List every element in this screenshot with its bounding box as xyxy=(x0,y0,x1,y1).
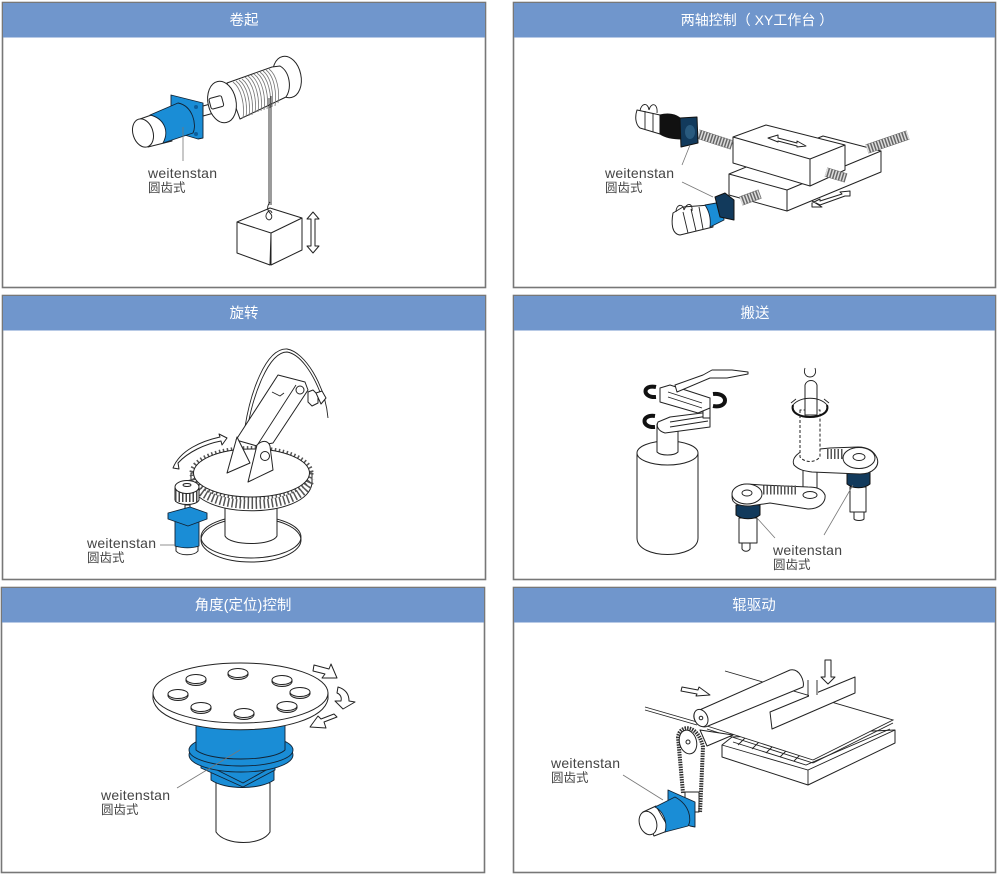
illustration: SCARA arm xyxy=(637,368,878,554)
panel frame xyxy=(2,588,484,872)
panel frame xyxy=(514,588,996,872)
label: weitenstan: weitenstan xyxy=(772,542,842,558)
header bar xyxy=(514,3,995,38)
gear teeth rim xyxy=(193,479,310,504)
callout line xyxy=(177,750,240,788)
blade gap xyxy=(809,675,818,705)
arrow right xyxy=(681,687,710,696)
panel: transfer xyxy=(514,296,996,580)
motion arrow xyxy=(173,434,227,469)
motor pulley xyxy=(685,792,699,812)
upper arm xyxy=(660,385,710,413)
spool flange far xyxy=(269,54,305,100)
column xyxy=(657,424,678,455)
wrist xyxy=(308,390,318,406)
lower motor flange xyxy=(715,193,734,220)
panel: rotation xyxy=(2,296,486,580)
belt xyxy=(678,728,703,813)
disc buttons xyxy=(168,668,310,720)
pressing blade xyxy=(770,677,855,729)
label: weitenstan: weitenstan xyxy=(86,535,156,551)
heading: 卷起 xyxy=(230,12,259,29)
gear top xyxy=(194,449,310,497)
motor flange xyxy=(171,95,203,139)
gear side xyxy=(191,473,312,511)
panel: angle positioning xyxy=(2,588,484,872)
arrow down xyxy=(821,660,835,684)
motor body xyxy=(655,797,690,832)
label: weitenstan: weitenstan xyxy=(604,165,674,181)
header bar xyxy=(514,588,995,622)
panel frame xyxy=(2,296,486,580)
arrow middle xyxy=(335,687,355,709)
lower plate xyxy=(732,484,825,509)
cable xyxy=(245,349,328,427)
heading: 辊驱动 xyxy=(732,597,776,614)
label: weitenstan: weitenstan xyxy=(147,165,217,181)
heading: 搬送 xyxy=(740,305,770,322)
callout line xyxy=(623,775,663,800)
callout lines xyxy=(682,145,713,197)
tray xyxy=(722,730,895,785)
sheet edges xyxy=(725,671,893,763)
lower motor blue ring xyxy=(705,202,724,227)
arm link xyxy=(236,375,308,446)
base disc xyxy=(201,518,301,562)
gap edges xyxy=(808,680,817,696)
disc xyxy=(153,693,328,730)
header bar xyxy=(514,296,995,330)
motor flange xyxy=(168,507,207,526)
panel frame xyxy=(514,296,996,580)
upper motor black section xyxy=(660,114,682,139)
header bar xyxy=(2,588,484,622)
panel: roller drive xyxy=(514,588,996,872)
shaft tip xyxy=(805,380,817,415)
callout line xyxy=(182,127,184,161)
heading: 角度(定位)控制 xyxy=(195,597,291,614)
middle column xyxy=(803,470,817,495)
elbow xyxy=(703,398,710,418)
label: type: 圆齿式 xyxy=(148,181,186,195)
small screw xyxy=(826,172,846,178)
barrel xyxy=(225,500,277,544)
web line xyxy=(645,707,813,763)
illustration: rotary index table xyxy=(153,663,355,842)
panel frame xyxy=(514,2,996,288)
left motor xyxy=(739,518,757,543)
upper screw xyxy=(698,134,732,145)
ring arrow xyxy=(793,405,827,417)
lower roller xyxy=(700,730,733,746)
lower belt teeth xyxy=(763,486,796,494)
illustration: winch with motor xyxy=(129,54,319,265)
upper belt teeth xyxy=(827,449,843,459)
motor shaft xyxy=(185,505,190,516)
weight block xyxy=(237,208,302,265)
arrow bottom xyxy=(310,714,337,728)
blue body xyxy=(196,725,285,759)
upper pulley xyxy=(843,448,875,468)
label: type: 圆齿式 xyxy=(773,558,811,572)
lower motor end xyxy=(672,205,713,235)
label: type: 圆齿式 xyxy=(87,551,125,565)
motor flange xyxy=(668,790,695,827)
pinion xyxy=(175,488,199,504)
motor end xyxy=(643,806,670,836)
illustration: two-axis table xyxy=(636,104,908,235)
motor body xyxy=(150,103,194,143)
flange xyxy=(189,738,293,772)
rope xyxy=(269,96,271,205)
spool flange near xyxy=(204,79,240,125)
shaft nose xyxy=(209,95,224,109)
callout line xyxy=(160,544,175,546)
rotation arrows xyxy=(646,387,656,397)
label: weitenstan: weitenstan xyxy=(100,787,170,803)
clevis right xyxy=(248,441,273,482)
label: type: 圆齿式 xyxy=(551,771,589,785)
heading: 两轴控制（ XY工作台 ） xyxy=(681,12,833,28)
label: type: 圆齿式 xyxy=(605,181,643,195)
gear top teeth xyxy=(192,448,312,498)
upper plate xyxy=(793,447,878,474)
panel: XY table xyxy=(514,2,996,288)
illustration: roller feed xyxy=(636,660,895,837)
pulley xyxy=(677,728,699,756)
label: type: 圆齿式 xyxy=(101,803,139,817)
up-down arrow xyxy=(307,212,319,253)
lower screw xyxy=(741,194,760,201)
sheet xyxy=(707,671,893,760)
top ring arrow xyxy=(804,368,816,377)
hex base xyxy=(211,770,274,788)
lower arm xyxy=(657,412,710,433)
lower block xyxy=(729,136,881,211)
label: weitenstan: weitenstan xyxy=(550,755,620,771)
panel: winding xyxy=(2,2,486,288)
upper block xyxy=(733,125,845,186)
callout lines xyxy=(757,485,853,538)
spline shaft xyxy=(800,410,820,462)
rope windings xyxy=(233,69,279,118)
upper motor end xyxy=(636,110,660,134)
right motor xyxy=(850,487,866,512)
upper motor flange xyxy=(680,117,698,147)
right screw xyxy=(867,135,908,149)
tray slats xyxy=(738,738,801,761)
motor lower body xyxy=(176,540,198,555)
output cylinder xyxy=(216,783,270,842)
arrow top xyxy=(313,664,337,678)
spool barrel xyxy=(227,66,289,119)
arrow on lower block xyxy=(812,191,850,207)
lower pulley xyxy=(732,484,762,504)
header bar xyxy=(3,3,485,38)
motor terminal xyxy=(640,104,657,113)
motor end xyxy=(140,112,172,147)
clevis left xyxy=(227,437,250,473)
heading: 旋转 xyxy=(230,305,258,322)
cylinder base xyxy=(637,453,698,554)
arrow on upper block xyxy=(768,135,806,147)
illustration: rotary arm xyxy=(168,349,328,562)
cable second line xyxy=(248,352,320,425)
header bar xyxy=(3,296,485,330)
motor terminal xyxy=(676,204,692,212)
hook xyxy=(266,202,272,220)
shaft xyxy=(203,103,214,116)
motor blue body xyxy=(175,520,199,548)
panel frame xyxy=(2,2,486,288)
column foot xyxy=(803,492,817,498)
fork arm xyxy=(675,370,748,392)
roller xyxy=(694,670,803,727)
